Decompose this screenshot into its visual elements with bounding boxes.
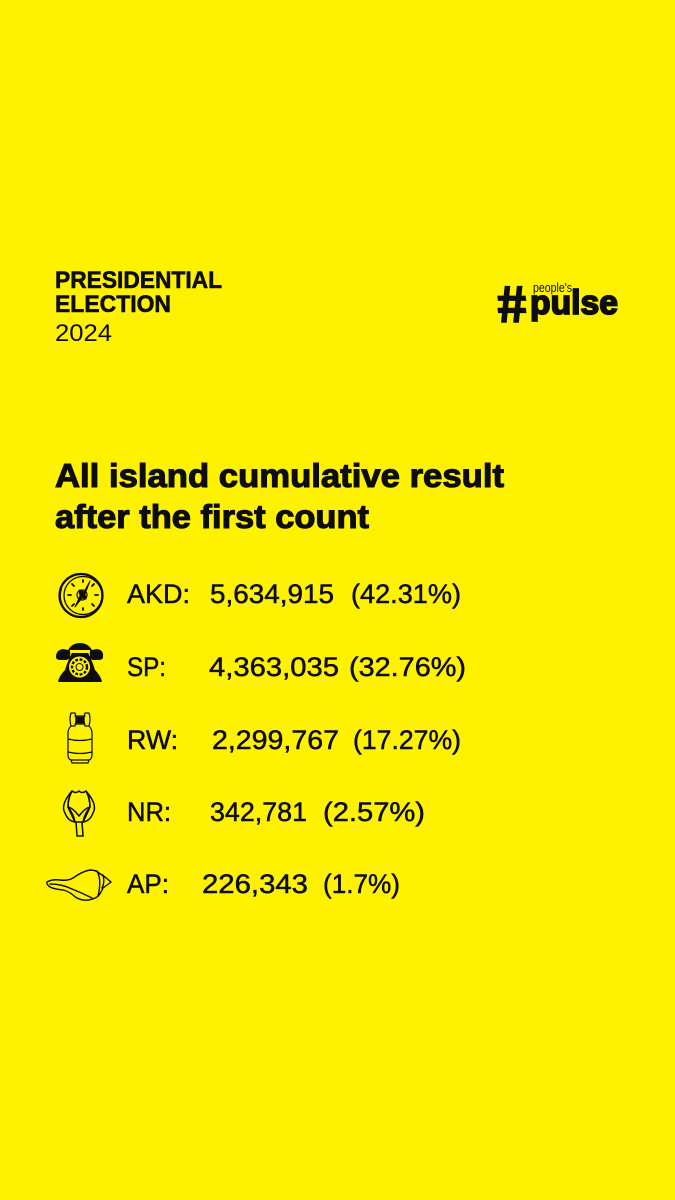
votes: AP: 226,343	[202, 869, 308, 899]
title: all island cumulative result: All island cumulative result	[55, 457, 504, 494]
heading: presidential election 2024: PRESIDENTIAL	[55, 267, 222, 294]
share: RW: (17.27%)	[353, 725, 461, 755]
label: AP: AP:	[127, 869, 169, 899]
icon: compass	[60, 574, 102, 617]
heading: presidential election 2024	[55, 267, 222, 347]
share: NR: (2.57%)	[323, 797, 425, 827]
logo: #peoples pulse: #	[493, 276, 530, 334]
share: AP: (1.7%)	[323, 869, 400, 899]
row: AKD result	[60, 574, 461, 617]
votes: RW: 2,299,767	[212, 725, 339, 755]
votes: AKD: 5,634,915	[210, 579, 334, 609]
label: RW: RW:	[127, 725, 178, 755]
icon: telephone	[56, 643, 103, 682]
icon: conch shell	[47, 870, 111, 900]
logo: #peoples pulse: pulse	[530, 284, 618, 322]
share: AKD: (42.31%)	[351, 579, 461, 609]
label: AKD: AKD:	[127, 579, 190, 609]
row: SP result	[56, 643, 466, 682]
logo: #peoples pulse: people's	[533, 280, 572, 295]
heading: presidential election 2024: ELECTION	[55, 291, 171, 318]
icon: swan flower	[64, 791, 94, 836]
row: NR result	[64, 791, 425, 836]
label: SP: SP:	[127, 652, 166, 682]
share: SP: (32.76%)	[349, 652, 466, 682]
heading: presidential election 2024: 2024	[55, 320, 112, 347]
row: AP result	[47, 869, 400, 900]
title: all island cumulative result: after the first count	[55, 498, 369, 535]
votes: SP: 4,363,035	[209, 652, 339, 682]
row: RW result	[68, 713, 461, 763]
title: all island cumulative result	[55, 457, 504, 535]
votes: NR: 342,781	[210, 797, 307, 827]
label: NR: NR:	[127, 797, 171, 827]
icon: gas cylinder	[68, 713, 92, 763]
logo: #peoples pulse	[493, 276, 618, 334]
